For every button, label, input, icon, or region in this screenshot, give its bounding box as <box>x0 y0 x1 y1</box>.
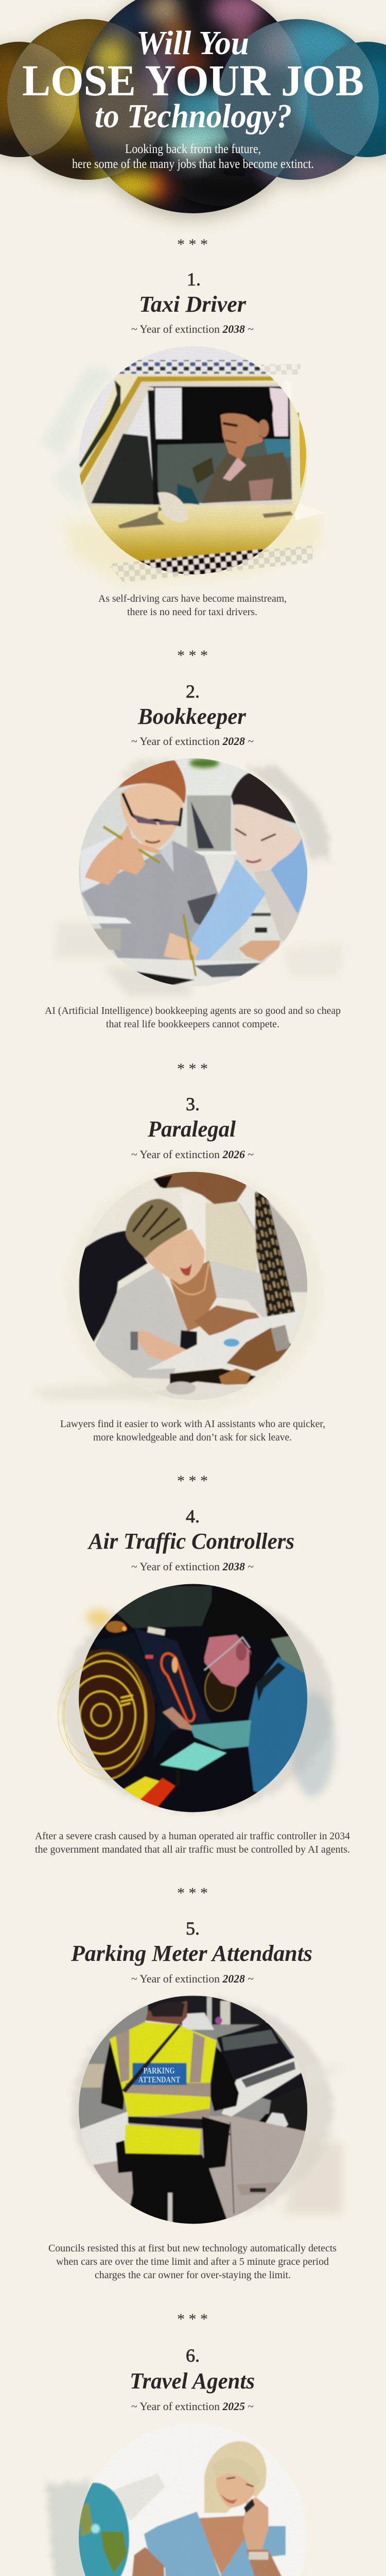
divider stars: * * * <box>177 1060 208 1077</box>
circle shadow <box>0 0 386 219</box>
job title: Travel Agents <box>130 2368 255 2394</box>
hands and pencil <box>164 933 200 961</box>
description <box>45 1005 341 1030</box>
year of extinction: ~ Year of extinction 2026 ~ <box>131 1148 254 1161</box>
description: more knowledgeable and don’t ask for sick leave. <box>93 1432 292 1443</box>
far left circle <box>0 42 31 157</box>
number: 3. <box>186 1094 200 1114</box>
film grain <box>0 0 386 216</box>
description: Lawyers find it easier to work with AI assistants who are quicker, <box>60 1418 325 1430</box>
divider stars: * * * <box>177 2311 208 2328</box>
job title: Bookkeeper <box>137 704 247 729</box>
subtitle: here some of the many jobs that have become extinct. <box>72 157 314 171</box>
title line 1: Will You <box>136 24 249 62</box>
number: 2. <box>186 681 200 702</box>
badge text: PARKING <box>143 2065 175 2076</box>
lens overlaps <box>7 22 379 177</box>
panel: bookkeeper <box>45 681 345 1030</box>
year of extinction: ~ Year of extinction 2028 ~ <box>131 735 254 748</box>
illustration: travel agent with globe <box>47 2421 335 2576</box>
badge text <box>138 2065 180 2084</box>
woman <box>170 1261 217 1332</box>
description <box>48 2243 337 2281</box>
year of extinction: ~ Year of extinction 2038 ~ <box>131 323 254 335</box>
mirror and handle <box>118 506 165 529</box>
woman <box>204 2441 266 2513</box>
year of extinction: ~ Year of extinction 2028 ~ <box>131 1972 254 1985</box>
left woman <box>80 834 118 891</box>
panel: paralegal <box>29 1094 325 1443</box>
globe <box>60 2483 129 2576</box>
description <box>35 1831 350 1855</box>
divider stars: * * * <box>177 236 208 253</box>
panel: air traffic controllers <box>35 1506 350 1855</box>
panel: travel agents <box>31 2345 354 2576</box>
desk papers <box>108 958 266 990</box>
operator <box>202 1586 291 1641</box>
description: the government mandated that all air traffic must be controlled by AI agents. <box>35 1844 350 1855</box>
far right circle <box>309 41 386 160</box>
number: 1. <box>187 269 201 290</box>
job title: Parking Meter Attendants <box>71 1941 312 1966</box>
illustration: paralegal and lawyer with document <box>29 1168 323 1411</box>
description: After a severe crash caused by a human operated air traffic controller in 2034 <box>35 1831 350 1842</box>
year of extinction: ~ Year of extinction 2038 ~ <box>131 1560 254 1573</box>
description: AI (Artificial Intelligence) bookkeeping agents are so good and so cheap <box>45 1005 341 1016</box>
panel: taxi driver <box>42 269 325 618</box>
divider stars: * * * <box>177 1472 208 1489</box>
description: As self-driving cars have become mainstream, <box>98 593 287 604</box>
description <box>98 593 287 618</box>
subtitle: Looking back from the future, <box>125 142 261 156</box>
hands and document <box>133 1330 187 1363</box>
job title: Taxi Driver <box>139 292 247 317</box>
illustration: two bookkeepers reading <box>54 756 345 996</box>
man <box>202 452 292 503</box>
centre circle <box>79 0 277 213</box>
subtitle <box>72 142 314 171</box>
left circle <box>7 19 109 180</box>
right woman <box>271 838 310 914</box>
divider stars: * * * <box>177 1885 208 1902</box>
description <box>60 1418 325 1443</box>
right circle <box>218 19 356 180</box>
illustration: man in yellow taxi <box>42 344 325 584</box>
description: that real life bookkeepers cannot compete. <box>106 1019 279 1030</box>
number: 4. <box>186 1506 200 1527</box>
number: 5. <box>186 1918 200 1939</box>
header: overlapping circles with title <box>0 0 386 219</box>
description: Councils resisted this at first but new technology automatically detects <box>48 2243 337 2254</box>
title line 2: LOSE YOUR JOB <box>22 56 364 105</box>
year of extinction: ~ Year of extinction 2025 ~ <box>131 2400 254 2413</box>
attendant <box>101 2038 128 2110</box>
illustration: controller at radar console <box>49 1581 335 1815</box>
panel: parking meter attendants <box>48 1918 345 2281</box>
job title: Air Traffic Controllers <box>87 1529 294 1554</box>
illustration: parking attendant beside car <box>72 1993 345 2227</box>
description: there is no need for taxi drivers. <box>127 606 257 618</box>
number: 6. <box>186 2345 200 2366</box>
stack of papers <box>87 916 132 923</box>
man <box>238 1187 310 1292</box>
divider stars: * * * <box>177 647 208 664</box>
job title: Paralegal <box>147 1116 236 1142</box>
badge text: ATTENDANT <box>138 2074 180 2084</box>
description: when cars are over the time limit and after a 5 minute grace period <box>56 2256 329 2267</box>
title line 3: to Technology? <box>95 97 292 135</box>
chair <box>79 1230 148 1342</box>
description: charges the car owner for over-staying the limit. <box>95 2269 291 2281</box>
